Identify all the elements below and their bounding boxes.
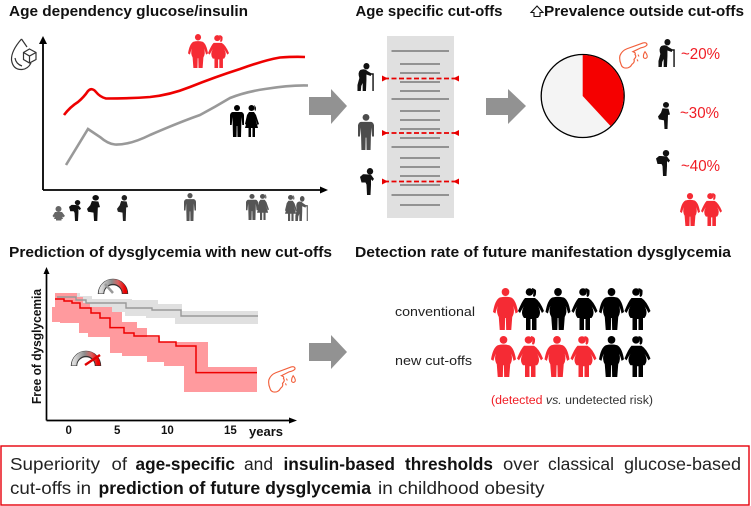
axis tick labels	[66, 425, 283, 439]
line chart: age dependency	[39, 36, 328, 194]
icon: teenager	[87, 195, 100, 221]
conclusion line 1: of	[112, 454, 127, 474]
icon: student	[117, 195, 128, 221]
icon: child	[360, 168, 374, 195]
conclusion line 2: in childhood obesity	[378, 478, 545, 498]
axis tick labels: years	[249, 425, 283, 439]
title: detection rate: Detection rate of future manifestation dysglycemia	[355, 244, 732, 261]
value: 30 percent: ~30%	[680, 105, 719, 122]
panel: reference range chart	[382, 36, 459, 218]
icon: finger prick hand	[269, 367, 295, 392]
icon: normal weight couple black	[230, 105, 259, 137]
arrow: to age specific cut-offs	[309, 89, 347, 124]
pictogram row: conventional	[493, 288, 650, 330]
title: age dependency: Age dependency glucose/insulin	[9, 3, 248, 20]
conclusion line 1: and	[244, 454, 273, 474]
cut-off markers	[382, 76, 459, 184]
pictogram row: new cut-offs	[491, 336, 650, 377]
axis tick labels: 0	[66, 425, 72, 437]
conclusion line 2	[10, 478, 545, 498]
title: prediction of dysglycemia: Prediction of dysglycemia with new cut-offs	[9, 244, 332, 261]
icon: elderly	[658, 39, 674, 67]
icon: teenager	[658, 102, 670, 129]
icon: elderly couple	[285, 195, 307, 221]
title: prevalence outside cut-offs: Prevalence outside cut-offs	[544, 3, 744, 20]
red confidence band	[52, 293, 257, 392]
conclusion line 1: over	[503, 454, 539, 474]
arrow: to detection rate	[309, 335, 347, 369]
icon: adult grey	[358, 114, 374, 150]
icon: elderly	[357, 63, 373, 91]
axis tick labels: 5	[114, 425, 121, 437]
pie chart: prevalence	[541, 54, 624, 138]
label: new cut-offs: new cut-offs	[395, 353, 473, 368]
grey confidence band	[55, 293, 258, 324]
axis tick labels: 15	[224, 425, 237, 437]
legend note: (detected vs. undetected risk)	[491, 395, 653, 407]
prevalence list	[656, 39, 722, 226]
conclusion line 1: age-specific	[136, 454, 235, 474]
axis tick labels: 10	[161, 425, 174, 437]
value: 40 percent: ~40%	[681, 158, 720, 175]
icon: child	[656, 150, 670, 176]
icon: finger prick hand	[620, 43, 647, 68]
conclusion line 1: glucose-based	[624, 454, 741, 474]
chart axes	[46, 274, 291, 420]
icon: gauge low	[101, 282, 125, 294]
survival chart	[29, 267, 297, 439]
chart axes	[43, 42, 322, 190]
cut-off dashed lines	[384, 78, 457, 182]
icon: gauge high	[74, 354, 100, 366]
title: age specific cut-offs: Age specific cut-offs	[356, 3, 502, 20]
conclusion line 1	[10, 454, 741, 474]
value: 20 percent: ~20%	[681, 46, 720, 63]
conclusion line 2: cut-offs in	[10, 478, 91, 498]
icon: obese couple red	[188, 34, 229, 68]
arrow: to prevalence	[486, 89, 526, 124]
age group icons	[52, 193, 307, 221]
axis title: Free of dysglycemia	[29, 288, 44, 404]
conclusion line 1: insulin-based	[284, 454, 395, 474]
grey survival line	[57, 297, 258, 316]
icon: adult	[184, 193, 196, 221]
icon: older couple	[246, 194, 269, 220]
conclusion box	[1, 446, 749, 505]
conclusion line 1: classical	[548, 454, 614, 474]
icon: obese couple	[680, 193, 722, 226]
icon: toddler	[52, 206, 65, 220]
conclusion line 1: Superiority	[10, 454, 100, 474]
conclusion line 2: prediction of future dysglycemia	[98, 478, 371, 498]
icon: child	[69, 200, 81, 221]
conclusion line 1: thresholds	[405, 454, 493, 474]
curve: normal weight grey	[66, 85, 308, 165]
label: conventional: conventional	[395, 304, 475, 319]
icon: glucose drop with sugar cube	[11, 39, 36, 70]
red survival line	[55, 299, 257, 373]
icon: up arrow	[531, 6, 543, 16]
curve: obese red	[64, 57, 305, 115]
